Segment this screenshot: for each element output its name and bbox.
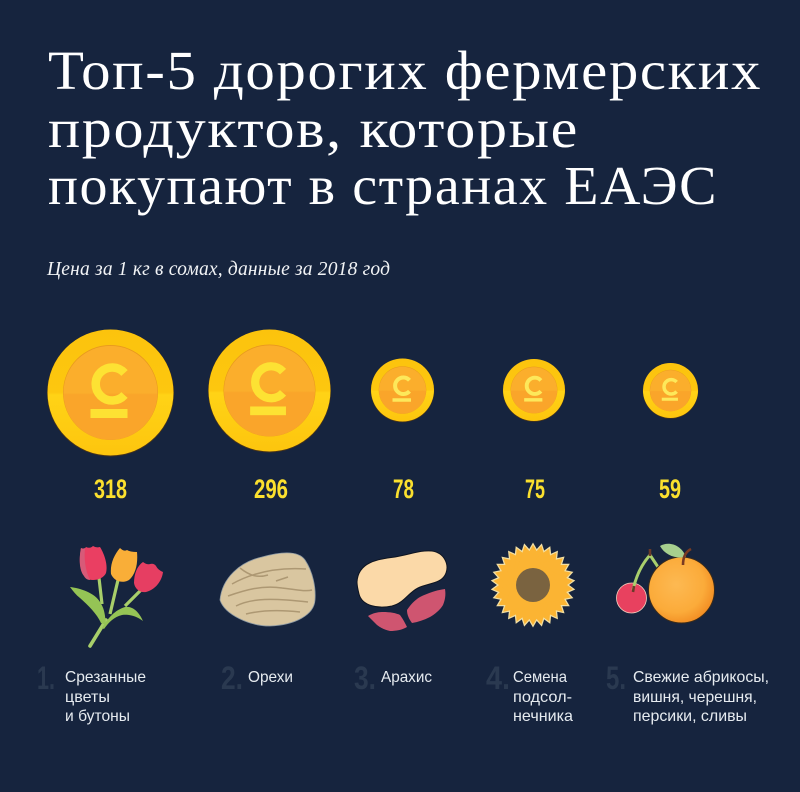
label 2: Орехи xyxy=(248,669,293,686)
label 4: нечника xyxy=(513,708,573,725)
label 1: 1. xyxy=(37,660,55,696)
label 3: 3. xyxy=(354,660,376,696)
label 3 xyxy=(354,660,432,696)
label 5: персики, сливы xyxy=(633,708,747,725)
title xyxy=(48,40,762,216)
title: продуктов, которые xyxy=(48,98,579,159)
icon: tulips xyxy=(70,546,163,646)
coin 4: 75 xyxy=(503,359,565,422)
icon: sunflower xyxy=(491,529,589,633)
icon: apricot and cherry xyxy=(616,544,714,623)
label 1: и бутоны xyxy=(65,708,130,725)
label 5: 5. xyxy=(606,660,626,696)
label 3: Арахис xyxy=(381,669,432,686)
label 5: вишня, черешня, xyxy=(633,689,757,706)
label 4: 4. xyxy=(486,660,510,696)
label 5: Свежие абрикосы, xyxy=(633,669,769,686)
coin 3: 78 xyxy=(371,358,434,422)
value: 318: 318 xyxy=(94,474,127,504)
coin 2: 296 xyxy=(208,330,331,452)
value: 75: 75 xyxy=(525,474,545,504)
coin 1: 318 xyxy=(47,330,174,456)
coin 5: 59 xyxy=(643,363,698,419)
subtitle: Цена за 1 кг в сомах, данные за 2018 год xyxy=(46,259,390,280)
label 2: 2. xyxy=(221,660,243,696)
title: покупают в странах ЕАЭС xyxy=(48,155,718,216)
icon: walnut xyxy=(220,553,315,626)
value: 296: 296 xyxy=(254,474,288,504)
label 1: цветы xyxy=(65,689,110,706)
label 4: подсол- xyxy=(513,689,572,706)
value: 78: 78 xyxy=(393,474,414,504)
title: Топ-5 дорогих фермерских xyxy=(48,40,762,101)
label 1 xyxy=(37,660,146,725)
icon: peanut with skins xyxy=(357,551,447,631)
value: 59: 59 xyxy=(659,474,681,504)
label 5 xyxy=(606,660,769,725)
label 4: Семена xyxy=(513,669,567,686)
label 1: Срезанные xyxy=(65,669,146,686)
label 4 xyxy=(486,660,573,725)
label 2 xyxy=(221,660,293,696)
